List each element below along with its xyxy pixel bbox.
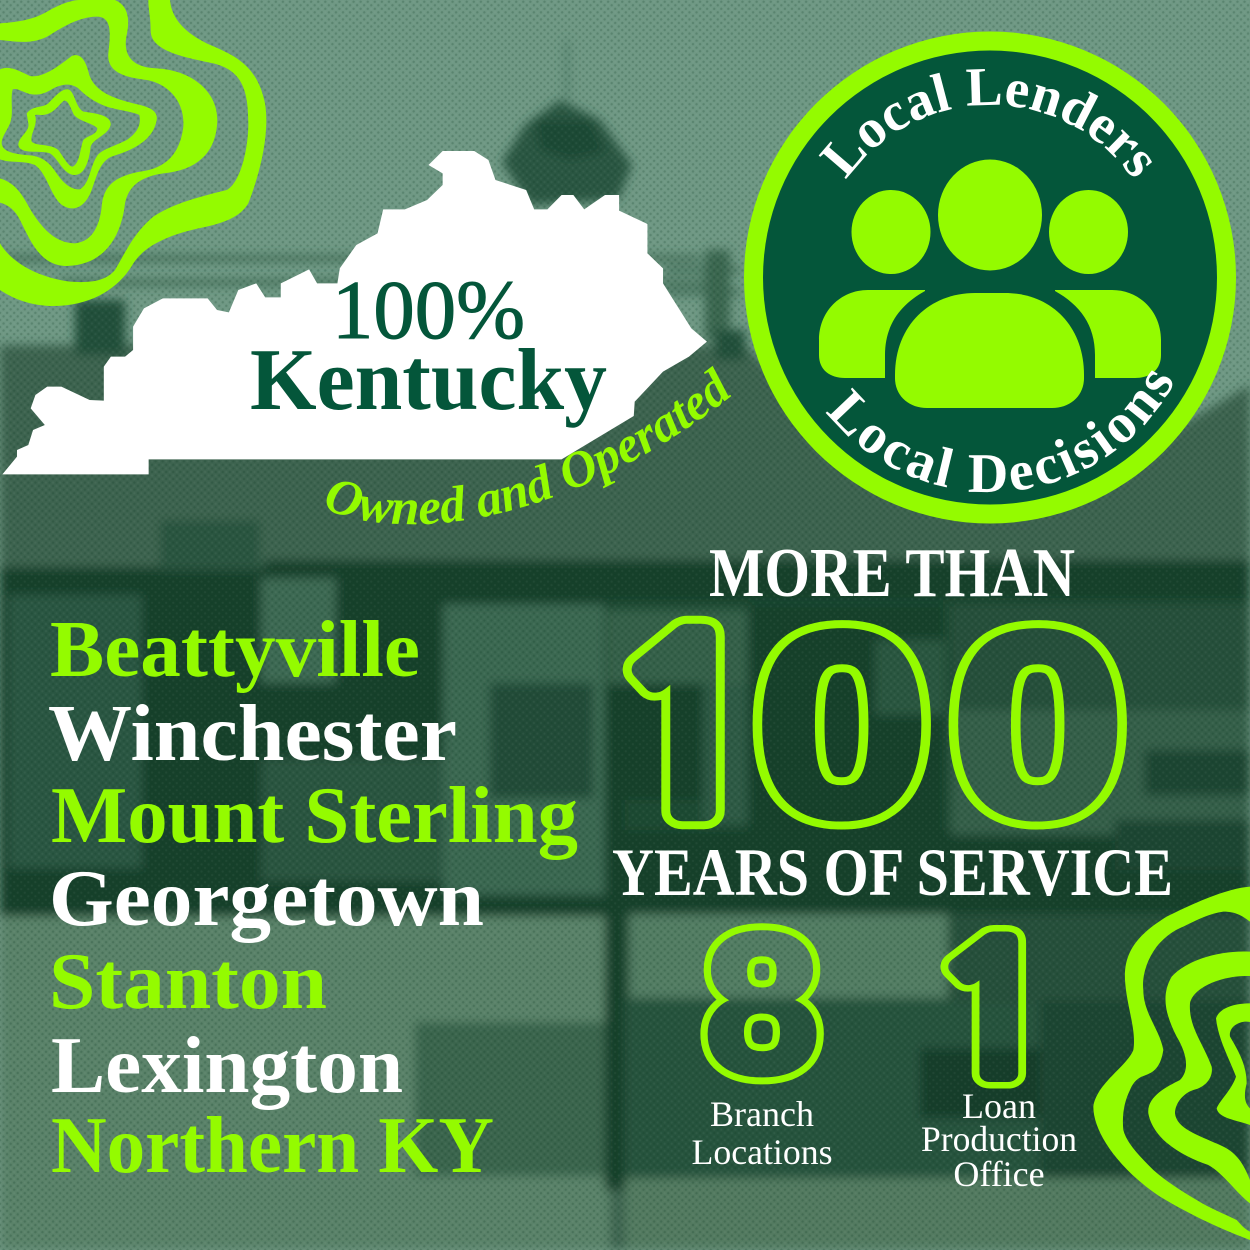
arc text: Local Lenders: Local Lenders bbox=[818, 69, 1152, 179]
dark fascia bbox=[0, 567, 265, 607]
middle right photo zones bbox=[625, 830, 1250, 914]
heading: MORE THAN: MORE THAN bbox=[709, 535, 1075, 612]
label: Loan Production Office: Office bbox=[953, 1154, 1045, 1194]
caption: Owned and Operated on a curve: Owned and Operated bbox=[326, 366, 732, 524]
stat: 8 branch locations bbox=[692, 923, 832, 1164]
label: Loan Production Office: Loan bbox=[962, 1086, 1036, 1126]
list: city names: Mount Sterling bbox=[51, 772, 578, 860]
label: Branch Locations: Locations bbox=[692, 1132, 832, 1172]
swirl: bottom-right contour rings bbox=[1093, 887, 1250, 1240]
badge: Local Lenders, Local Decisions bbox=[744, 32, 1236, 524]
label: Loan Production Office bbox=[921, 1086, 1077, 1194]
list: city names bbox=[48, 606, 578, 1190]
number: 1 outlined bbox=[940, 925, 1026, 1088]
lower light base bbox=[0, 916, 610, 1250]
heading: Kentucky: Kentucky bbox=[250, 332, 607, 429]
heading: YEARS OF SERVICE: YEARS OF SERVICE bbox=[612, 834, 1173, 910]
list: city names: Northern KY bbox=[51, 1102, 494, 1190]
list: city names: Beattyville bbox=[50, 606, 420, 694]
list: city names: Winchester bbox=[48, 690, 457, 778]
arc text: Local Decisions: Local Decisions bbox=[826, 370, 1172, 492]
number: 8 outlined bbox=[700, 923, 824, 1084]
medium panels on the left bbox=[8, 595, 142, 868]
list: city names: Stanton bbox=[49, 938, 327, 1026]
list: city names: Lexington bbox=[51, 1022, 403, 1110]
icon: group of three people bbox=[819, 160, 1161, 408]
list: city names: Georgetown bbox=[49, 855, 484, 943]
swirl: top-left contour rings bbox=[0, 0, 266, 306]
stat: 1 loan production office bbox=[920, 910, 1077, 1194]
roof mass bbox=[0, 345, 1250, 1250]
label: Branch Locations: Branch bbox=[710, 1094, 814, 1134]
label: Loan Production Office: Production bbox=[921, 1119, 1077, 1159]
tower bbox=[502, 100, 632, 205]
label: Branch Locations bbox=[692, 1094, 832, 1172]
heading: 100%: 100% bbox=[332, 264, 525, 357]
wires and posts bbox=[0, 256, 700, 261]
number: 100 outlined bbox=[622, 616, 1127, 830]
map: Kentucky silhouette bbox=[2, 151, 707, 474]
